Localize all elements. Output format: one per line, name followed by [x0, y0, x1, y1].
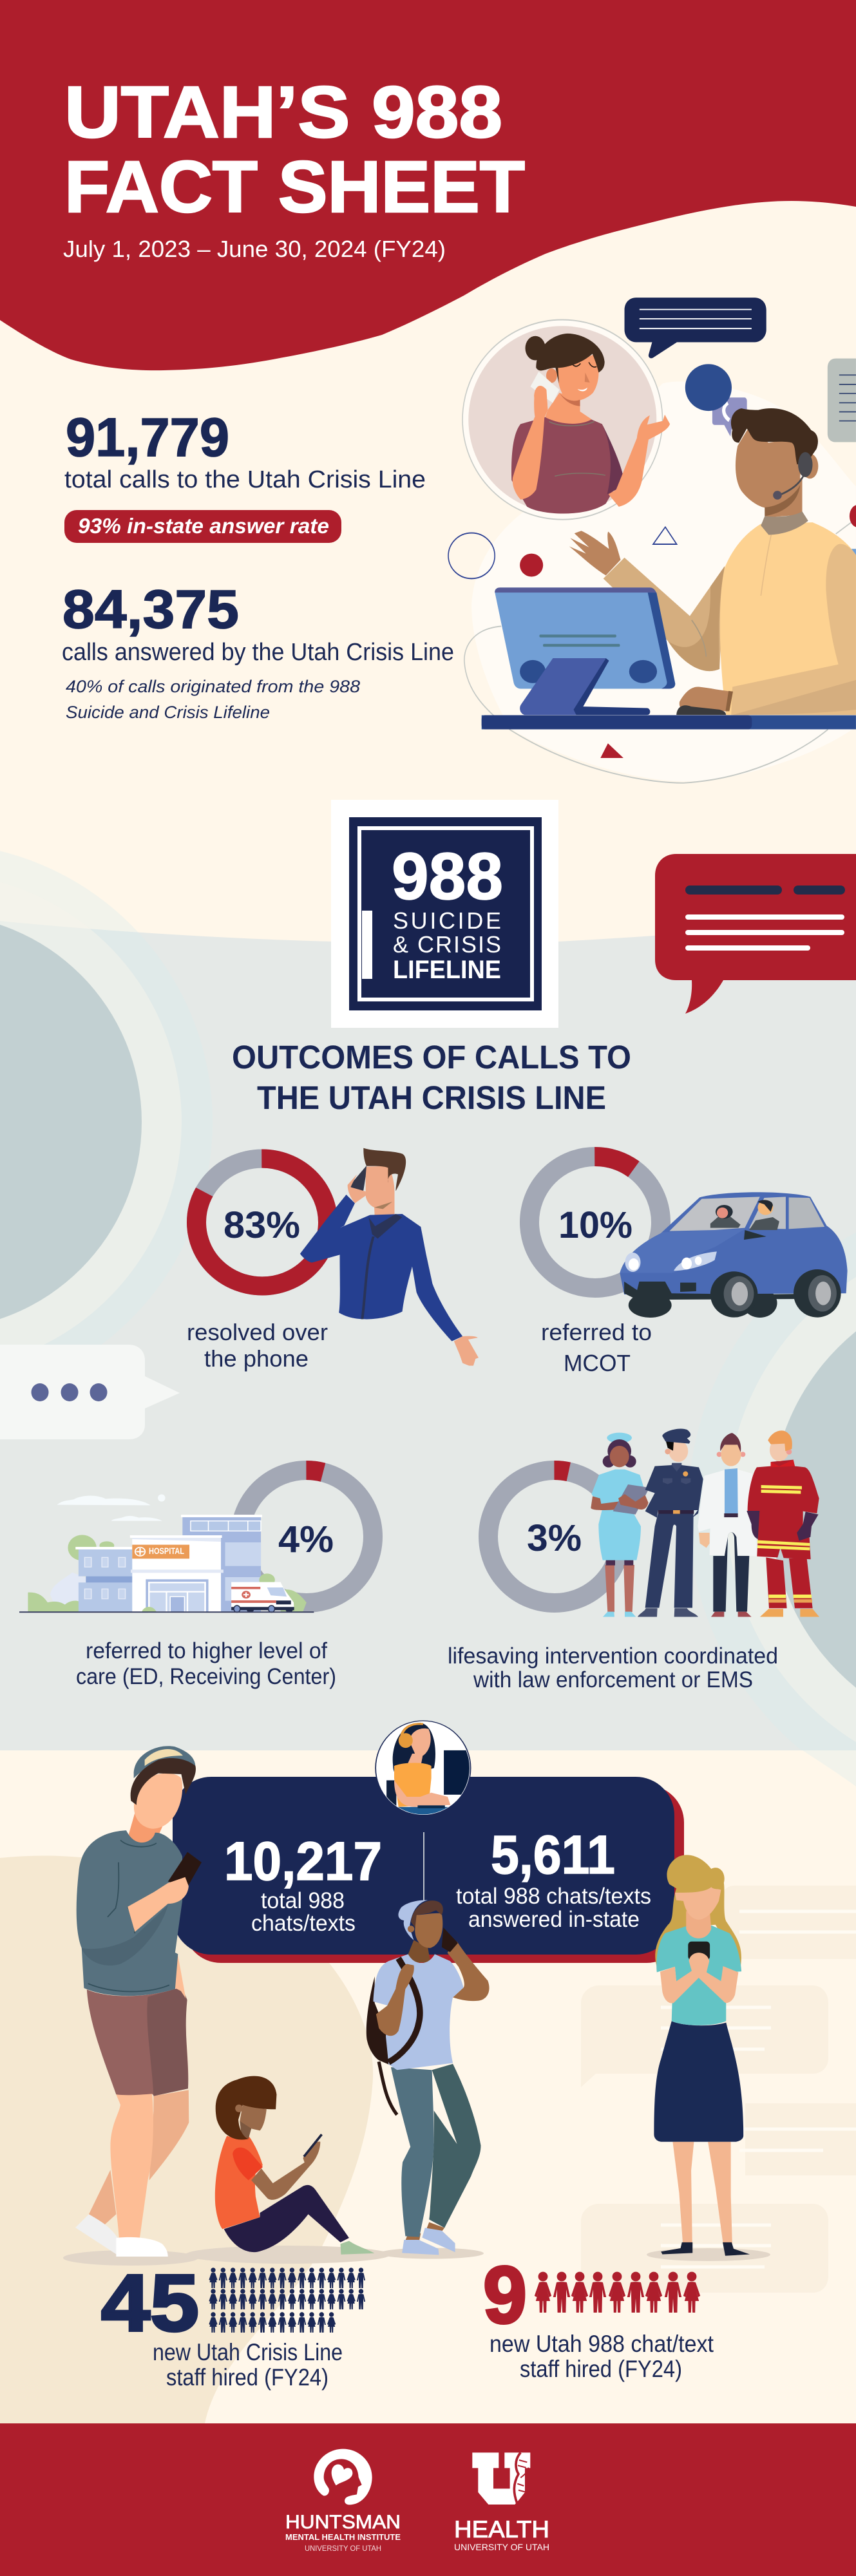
firefighter — [747, 1430, 819, 1617]
donut: 3%: 3% — [527, 1517, 582, 1559]
illustration: car — [620, 1192, 848, 1318]
panel: chats and texts — [173, 1777, 684, 1963]
heading: outcomes: OUTCOMES OF CALLS TO — [232, 1039, 631, 1075]
label: lifesaving intervention — [448, 1643, 778, 1692]
doctor — [698, 1433, 757, 1617]
title: UTAH’S 988 — [64, 71, 502, 153]
logo: University of Utah Health — [454, 2452, 549, 2552]
label: referred to MCOT: MCOT — [564, 1350, 631, 1376]
illustration: first responders — [591, 1428, 819, 1617]
speech bubble: navy — [625, 298, 766, 358]
stat: 9 new chat staff: 9 — [483, 2251, 527, 2340]
background circles right — [688, 1197, 856, 1822]
desk — [482, 715, 856, 729]
logo: University of Utah Health: UNIVERSITY OF UTAH — [454, 2542, 549, 2552]
stat: answered calls: calls answered by the Utah Crisis Line — [62, 639, 454, 666]
pill: in-state answer rate — [64, 510, 341, 543]
icon: typing speech bubble — [0, 1345, 180, 1439]
donut: 4%: 4% — [278, 1519, 334, 1560]
illustration: young man with phone and seated girl — [75, 1830, 374, 2257]
stat: chats answered in-state — [456, 1824, 651, 1932]
icon: head with heart — [314, 2449, 372, 2505]
subtitle: date range: July 1, 2023 – June 30, 2024 (FY24) — [63, 236, 446, 262]
donut: 3% — [488, 1470, 621, 1603]
faint chat bubble lines — [661, 1911, 856, 2267]
stat: total calls — [64, 407, 426, 493]
stat: answered calls: 40% of calls originated from the 988 — [66, 677, 360, 696]
logo: 988 suicide and crisis lifeline: & CRISIS — [393, 931, 501, 958]
seated girl — [215, 2076, 374, 2255]
label: referred to MCOT — [541, 1319, 652, 1376]
title: FACT SHEET — [64, 146, 525, 227]
stat: answered calls — [62, 579, 454, 722]
header red wave — [0, 0, 856, 370]
stat: 45 new crisis line staff: 45 — [101, 2259, 199, 2348]
donut: 4% — [240, 1470, 373, 1603]
icon: phone chat bubble — [685, 364, 747, 437]
stat: answered calls: 84,375 — [62, 579, 239, 639]
logo: Huntsman Mental Health Institute: MENTAL HEALTH INSTITUTE — [285, 2532, 401, 2542]
label: referred to higher level of care: care (ED, Receiving Center) — [76, 1664, 336, 1689]
label: new crisis line staff: staff hired (FY24) — [166, 2364, 328, 2391]
nurse — [591, 1433, 649, 1617]
label: lifesaving intervention: lifesaving intervention coordinated — [448, 1643, 778, 1669]
police officer — [638, 1428, 703, 1617]
decorative shapes — [448, 505, 856, 758]
stat: chats answered in-state: 5,611 — [491, 1824, 615, 1885]
logo: Huntsman Mental Health Institute: UNIVERSITY OF UTAH — [305, 2544, 381, 2553]
young man with backpack — [366, 1900, 490, 2255]
illustration: man on phone — [300, 1148, 479, 1366]
logo: 988 suicide and crisis lifeline: 988 — [392, 839, 503, 913]
panel: outcomes background — [0, 921, 856, 1750]
stat: chats answered in-state: total 988 chats/texts — [456, 1884, 651, 1909]
ground shadows — [63, 2246, 770, 2266]
illustration: caller and crisis line agent — [448, 298, 856, 783]
logo: 988 suicide and crisis lifeline — [331, 800, 558, 1028]
stat: total chats: 10,217 — [224, 1831, 382, 1891]
illustration: young man with backpack and young woman — [366, 1855, 750, 2256]
young man body — [75, 1830, 202, 2257]
text: hospital sign: HOSPITAL — [149, 1546, 184, 1556]
pictogram: 45 navy people — [209, 2268, 365, 2333]
heading: outcomes: THE UTAH CRISIS LINE — [257, 1079, 606, 1116]
label: resolved over the phone: the phone — [204, 1345, 309, 1372]
label: new chat staff: new Utah 988 chat/text — [490, 2331, 714, 2357]
heading: outcomes — [232, 1039, 631, 1116]
label: new crisis line staff: new Utah Crisis Line — [153, 2339, 343, 2365]
illustration: hospital — [19, 1494, 314, 1613]
label: new chat staff — [490, 2331, 714, 2382]
monitor — [495, 587, 675, 715]
icon: block U with DNA — [472, 2452, 530, 2505]
lower section background — [0, 1750, 856, 2423]
label: new chat staff: staff hired (FY24) — [520, 2356, 682, 2382]
footer band — [0, 2423, 856, 2576]
agent figure — [569, 408, 856, 715]
background circles left — [0, 843, 213, 1401]
background beige blob — [0, 1855, 373, 2423]
donut: 83%: 83% — [224, 1204, 300, 1246]
young woman with phone — [654, 1855, 750, 2256]
label: referred to MCOT: referred to — [541, 1319, 652, 1345]
pictogram: 9 red people — [535, 2272, 700, 2313]
logo: 988 suicide and crisis lifeline: LIFELINE — [393, 956, 501, 984]
logo: Huntsman Mental Health Institute: HUNTSMAN — [285, 2512, 401, 2533]
document panel — [828, 359, 856, 442]
stat: total chats: chats/texts — [251, 1911, 356, 1936]
logo: Huntsman Mental Health Institute — [285, 2449, 401, 2553]
label: referred to higher level of care — [76, 1638, 336, 1689]
donut: 83% — [196, 1159, 328, 1286]
stat: total calls: 91,779 — [66, 407, 229, 468]
illustration: young man with phone, head — [128, 1746, 196, 1844]
stat: total chats: total 988 — [261, 1888, 345, 1913]
icon: chat counselor portrait — [376, 1721, 471, 1816]
icon: red speech bubble — [655, 854, 856, 1014]
title — [64, 71, 525, 227]
label: lifesaving intervention: with law enforcement or EMS — [473, 1667, 753, 1692]
logo: 988 suicide and crisis lifeline: SUICIDE — [393, 907, 501, 934]
caller portrait circle — [462, 320, 670, 520]
stat: chats answered in-state: answered in-state — [468, 1907, 640, 1932]
donut: 10% — [529, 1157, 661, 1288]
donut: 10%: 10% — [558, 1204, 632, 1246]
label: resolved over the phone — [187, 1319, 328, 1372]
outline curve — [464, 522, 851, 783]
label: resolved over the phone: resolved over — [187, 1319, 328, 1345]
label: new crisis line staff — [153, 2339, 343, 2391]
label: referred to higher level of care: referred to higher level of — [86, 1638, 327, 1663]
stat: total chats — [224, 1831, 382, 1936]
logo: University of Utah Health: HEALTH — [454, 2516, 549, 2543]
stat: total calls: total calls to the Utah Crisis Line — [64, 466, 426, 493]
pill: in-state answer rate: 93% in-state answer rate — [78, 514, 329, 538]
backdrop blob — [471, 381, 856, 781]
faint chat bubbles — [581, 1886, 856, 2293]
stat: answered calls: Suicide and Crisis Lifeline — [66, 703, 270, 722]
